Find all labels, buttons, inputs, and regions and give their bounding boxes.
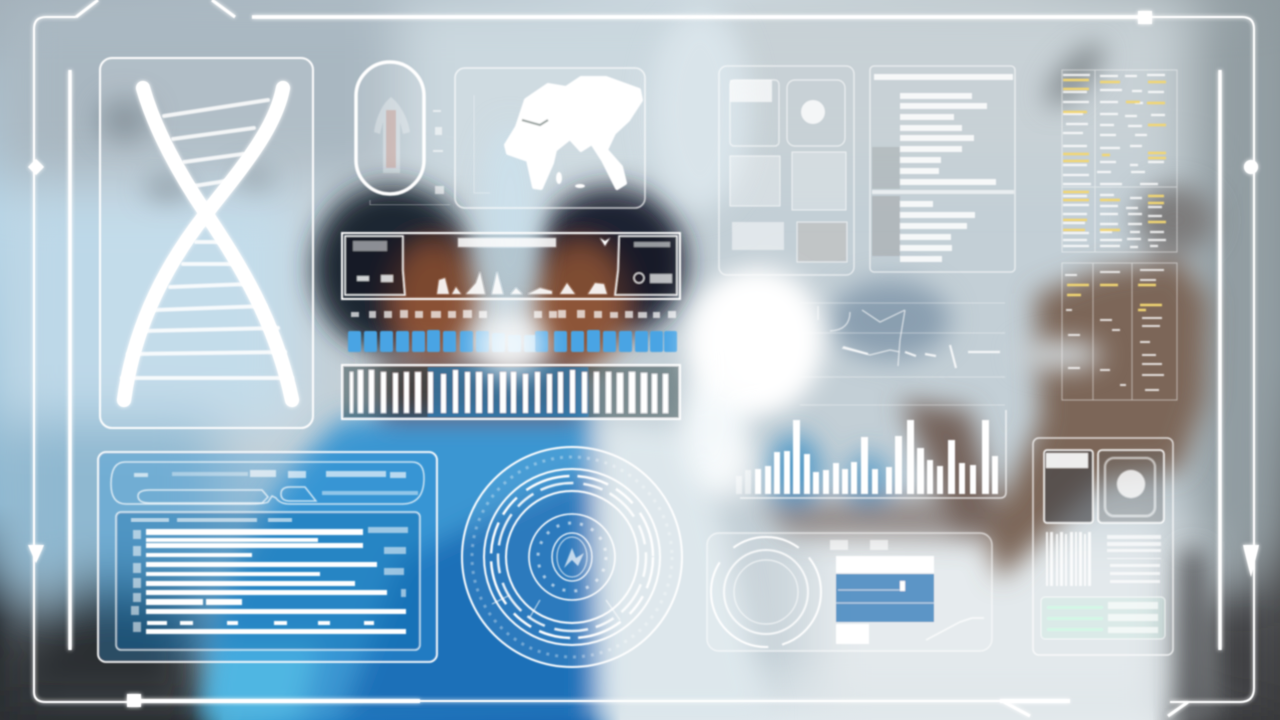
chart bars — [736, 420, 998, 494]
small glyph row — [351, 310, 676, 318]
panel: scan thumbnails — [719, 66, 854, 275]
header labels — [134, 470, 418, 495]
text block — [1107, 535, 1161, 583]
radial scanner — [462, 447, 682, 667]
blue level blocks — [348, 330, 677, 352]
panel: diagnostics card — [1033, 438, 1173, 655]
lower section marks — [1065, 270, 1164, 390]
foreground light haze — [476, 283, 803, 500]
icon: body scan capsule — [356, 62, 450, 205]
map continents — [506, 78, 641, 188]
monitor header — [342, 233, 680, 299]
DNA rungs — [122, 100, 292, 378]
data dashes — [1063, 75, 1166, 247]
panel: horizontal bar report — [98, 452, 437, 662]
panel: world map — [455, 68, 645, 208]
chart: bar chart — [736, 410, 1006, 498]
gauge rings — [711, 537, 821, 647]
list bars — [872, 74, 1014, 262]
report caption — [131, 518, 292, 522]
dark thumbnail — [1044, 450, 1093, 523]
panel: central monitor — [342, 233, 680, 419]
barcode meter — [342, 365, 680, 419]
scan thumbnail — [1098, 450, 1164, 523]
data grid — [1062, 70, 1177, 400]
panel: DNA helix — [100, 58, 313, 428]
panel: gauge and readout — [707, 533, 992, 651]
vein network — [800, 303, 1005, 405]
report bars — [146, 529, 406, 634]
waveform block — [1046, 532, 1091, 586]
side marks — [433, 110, 444, 194]
row and value labels — [131, 527, 408, 632]
amber data dashes — [1063, 80, 1166, 310]
human figure — [374, 97, 410, 173]
readout — [836, 556, 934, 573]
header pills — [111, 462, 424, 504]
panel: list of bars — [870, 66, 1015, 272]
DNA strands — [124, 88, 292, 400]
green status panel — [1041, 597, 1165, 639]
panel: data columns — [1062, 70, 1177, 400]
